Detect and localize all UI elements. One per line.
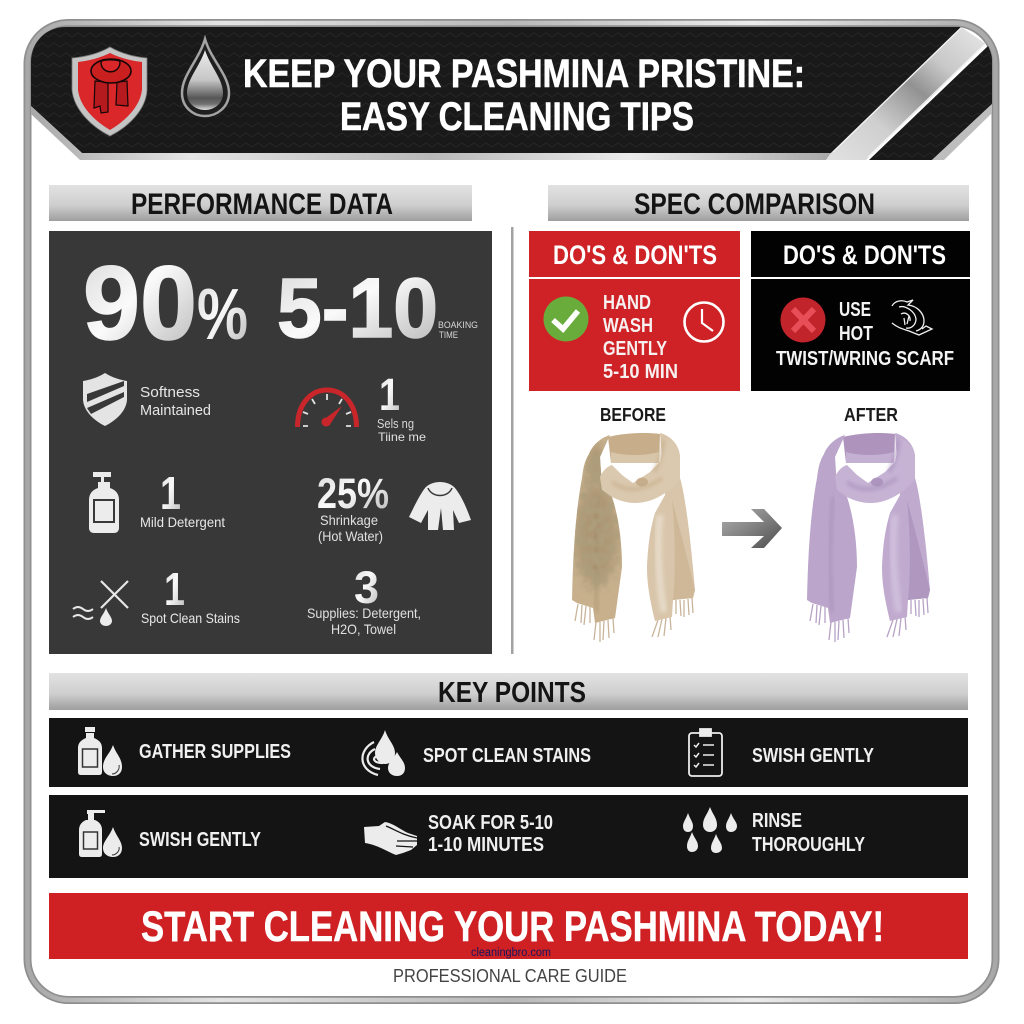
- stat: 5-10 soaking time: TIME: [439, 330, 458, 341]
- stat: 1 mild detergent: [140, 467, 225, 530]
- stat: 5-10 soaking time: BOAKING: [438, 320, 478, 331]
- stat: 1 soaking time: Tiine me: [378, 430, 426, 444]
- text: gather supplies: GATHER SUPPLIES: [139, 741, 291, 763]
- stat: 1 soaking time: 1: [379, 369, 400, 420]
- section heading: key points: [49, 673, 968, 710]
- icon: bottle and drop: [78, 727, 122, 776]
- panel: performance data: [49, 231, 492, 654]
- header banner: [31, 27, 992, 160]
- icon: gauge: [298, 390, 356, 427]
- stat: 3 supplies: Supplies: Detergent,: [307, 605, 421, 621]
- illustration: stained beige scarf: [570, 433, 695, 642]
- icon: shield logo with scarf: [72, 47, 147, 136]
- icon: water drops: [683, 807, 737, 853]
- text: twist wring scarf: TWIST/WRING SCARF: [776, 348, 954, 370]
- text: hand wash gently: [603, 292, 678, 383]
- illustration: clean lilac scarf: [807, 433, 930, 642]
- stat: 25 percent shrinkage: 25%: [317, 470, 389, 518]
- text: soak for 5-10: 1-10 MINUTES: [428, 834, 544, 856]
- stat: 25 percent shrinkage: [317, 470, 389, 544]
- text: hand wash gently: GENTLY: [603, 338, 668, 360]
- text: website: cleaningbro.com: [471, 947, 551, 959]
- icon: green check: [544, 296, 588, 342]
- section heading: performance data: [49, 185, 472, 221]
- icon: no water, droplet: [73, 581, 128, 626]
- text: swish gently: SWISH GENTLY: [139, 829, 262, 851]
- text: use hot: USE: [839, 299, 871, 321]
- text: softness maintained: Softness: [140, 384, 200, 401]
- panel: do's card red: DO'S & DON'TS: [553, 240, 717, 270]
- text: spot clean stains: SPOT CLEAN STAINS: [423, 745, 591, 767]
- stat: 1 soaking time: Sels ng: [377, 416, 414, 431]
- text: softness maintained: Maintained: [140, 402, 211, 419]
- stat: 3 supplies: 3: [354, 562, 379, 613]
- panel: do's card red: [529, 231, 740, 391]
- title: [243, 52, 805, 139]
- panel: key points row two: [49, 795, 968, 878]
- icon: scarf: [409, 482, 471, 530]
- icon: clock: [684, 302, 724, 342]
- text: rinse thoroughly: RINSE: [752, 810, 802, 832]
- panel: don'ts card black: [751, 231, 970, 391]
- stat: 1 mild detergent: 1: [160, 467, 181, 519]
- stat: 90 percent: %: [197, 275, 248, 355]
- label: after: AFTER: [844, 405, 898, 425]
- stat: 1 mild detergent: Mild Detergent: [140, 514, 225, 530]
- text: swish gently: SWISH GENTLY: [752, 745, 875, 767]
- icon: wringing hands: [892, 300, 932, 335]
- icon: red cross: [780, 298, 826, 342]
- panel: don'ts card black: DO'S & DON'TS: [783, 240, 946, 270]
- icon: silver water drop: [182, 39, 229, 116]
- section heading: spec comparison: [548, 185, 969, 221]
- text: soak for 5-10: SOAK FOR 5-10: [428, 812, 553, 834]
- section heading: spec comparison: SPEC COMPARISON: [634, 188, 875, 221]
- label: before: BEFORE: [600, 405, 666, 425]
- title: KEEP YOUR PASHMINA PRISTINE:: [243, 52, 805, 96]
- text: soak for 5-10: [428, 812, 553, 856]
- text: use hot: [839, 299, 873, 345]
- icon: clipboard checklist: [689, 729, 722, 776]
- footer text: PROFESSIONAL CARE GUIDE: [393, 966, 627, 986]
- icon: striped shield: [83, 373, 127, 426]
- stat: 1 spot clean stains: [141, 563, 240, 626]
- text: use hot: HOT: [839, 323, 873, 345]
- icon: arrow: [722, 509, 782, 548]
- text: rinse thoroughly: [752, 810, 866, 856]
- panel: key points row one: [49, 718, 968, 787]
- stat: 3 supplies: [307, 562, 421, 637]
- text: hand wash gently: 5-10 MIN: [603, 361, 678, 383]
- title: EASY CLEANING TIPS: [340, 95, 694, 139]
- stat: 3 supplies: H2O, Towel: [331, 621, 396, 637]
- text: softness maintained: [140, 384, 211, 419]
- stat: 1 soaking time: [377, 369, 426, 444]
- stat: 25 percent shrinkage: Shrinkage: [320, 512, 378, 528]
- section heading: performance data: PERFORMANCE DATA: [131, 188, 393, 221]
- icon: hand: [364, 822, 417, 855]
- stat: 1 spot clean stains: 1: [164, 563, 185, 615]
- icon: stain swirl and drops: [362, 730, 405, 776]
- stat: 1 spot clean stains: Spot Clean Stains: [141, 610, 240, 626]
- icon: detergent bottle: [89, 472, 119, 533]
- text: hand wash gently: HAND: [603, 292, 651, 314]
- stat: 90 percent: 90: [83, 245, 197, 362]
- call to action banner: [49, 893, 968, 959]
- section heading: key points: KEY POINTS: [438, 677, 586, 709]
- icon: pump bottle and drop: [79, 810, 122, 857]
- stat: 5-10 soaking time: 5-10: [277, 261, 438, 355]
- stat: 25 percent shrinkage: (Hot Water): [318, 528, 383, 544]
- text: hand wash gently: WASH: [603, 315, 653, 337]
- text: rinse thoroughly: THOROUGHLY: [752, 834, 866, 856]
